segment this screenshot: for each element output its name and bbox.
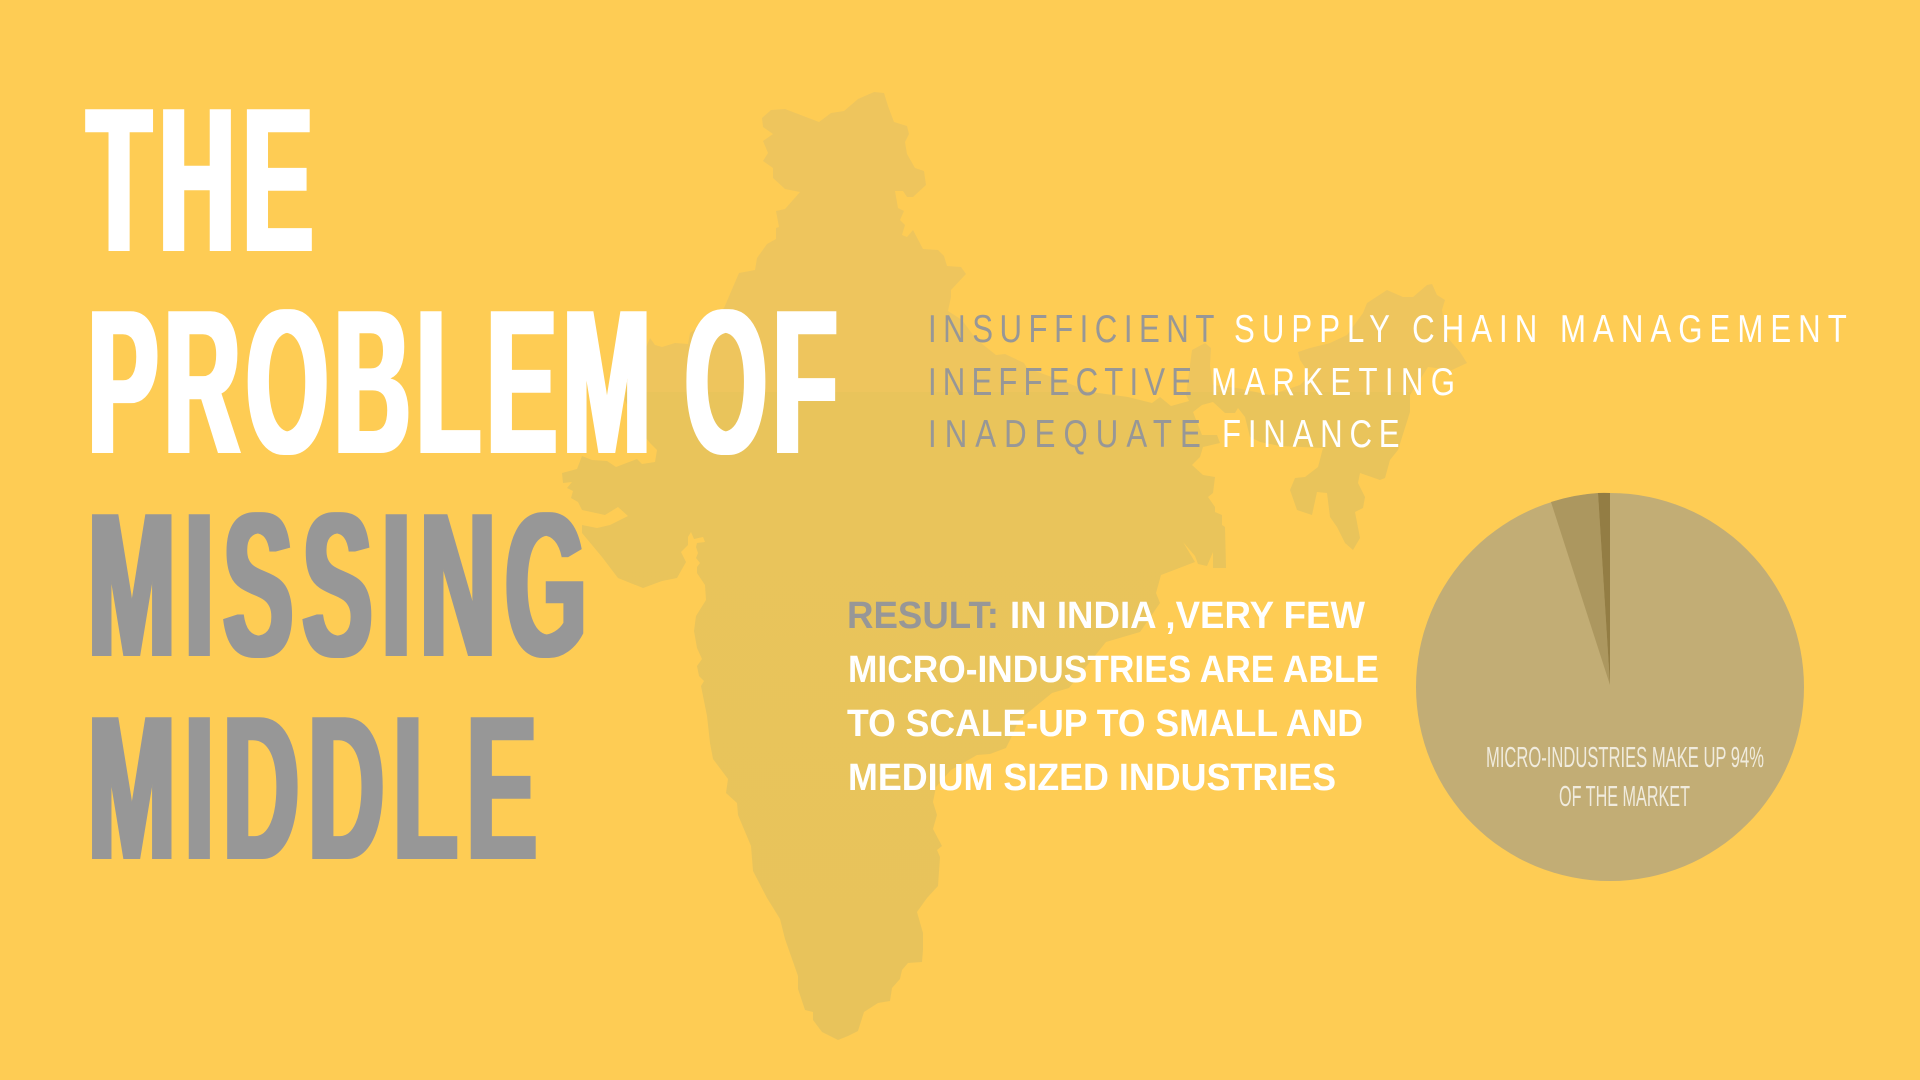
result line 4: MEDIUM SIZED INDUSTRIES xyxy=(848,757,1336,799)
result text block xyxy=(847,595,1379,799)
title line: PROBLEM OF: PROBLEM OF xyxy=(88,267,837,497)
cause 1: insufficient: INSUFFICIENT xyxy=(928,308,1214,351)
title line: MIDDLE: MIDDLE xyxy=(88,673,537,903)
pie slice: micro-industries xyxy=(1416,493,1804,881)
pie slice: medium industries xyxy=(1598,493,1610,685)
result line 2: MICRO-INDUSTRIES ARE ABLE xyxy=(848,649,1379,691)
pie slice: small industries xyxy=(1551,493,1610,685)
cause 2: ineffective: INEFFECTIVE xyxy=(928,361,1192,404)
cause 3: finance: FINANCE xyxy=(1222,413,1400,456)
map of India silhouette xyxy=(562,92,1467,1040)
cause 1: supply chain management: SUPPLY CHAIN MANAGEMENT xyxy=(1234,308,1847,351)
cause 2: marketing: MARKETING xyxy=(1211,361,1455,404)
pie chart xyxy=(1416,493,1804,881)
result line 3: TO SCALE-UP TO SMALL AND xyxy=(847,703,1363,745)
cause 3: inadequate: INADEQUATE xyxy=(928,413,1201,456)
list of causes xyxy=(928,308,1847,456)
title xyxy=(87,65,837,903)
pie label: OF THE MARKET xyxy=(1559,781,1690,813)
title line: THE: THE xyxy=(87,65,313,295)
title line: MISSING: MISSING xyxy=(88,470,587,700)
pie label xyxy=(1486,742,1764,813)
result line 1: IN INDIA ,VERY FEW xyxy=(1010,595,1365,637)
result label: RESULT: xyxy=(847,595,999,637)
